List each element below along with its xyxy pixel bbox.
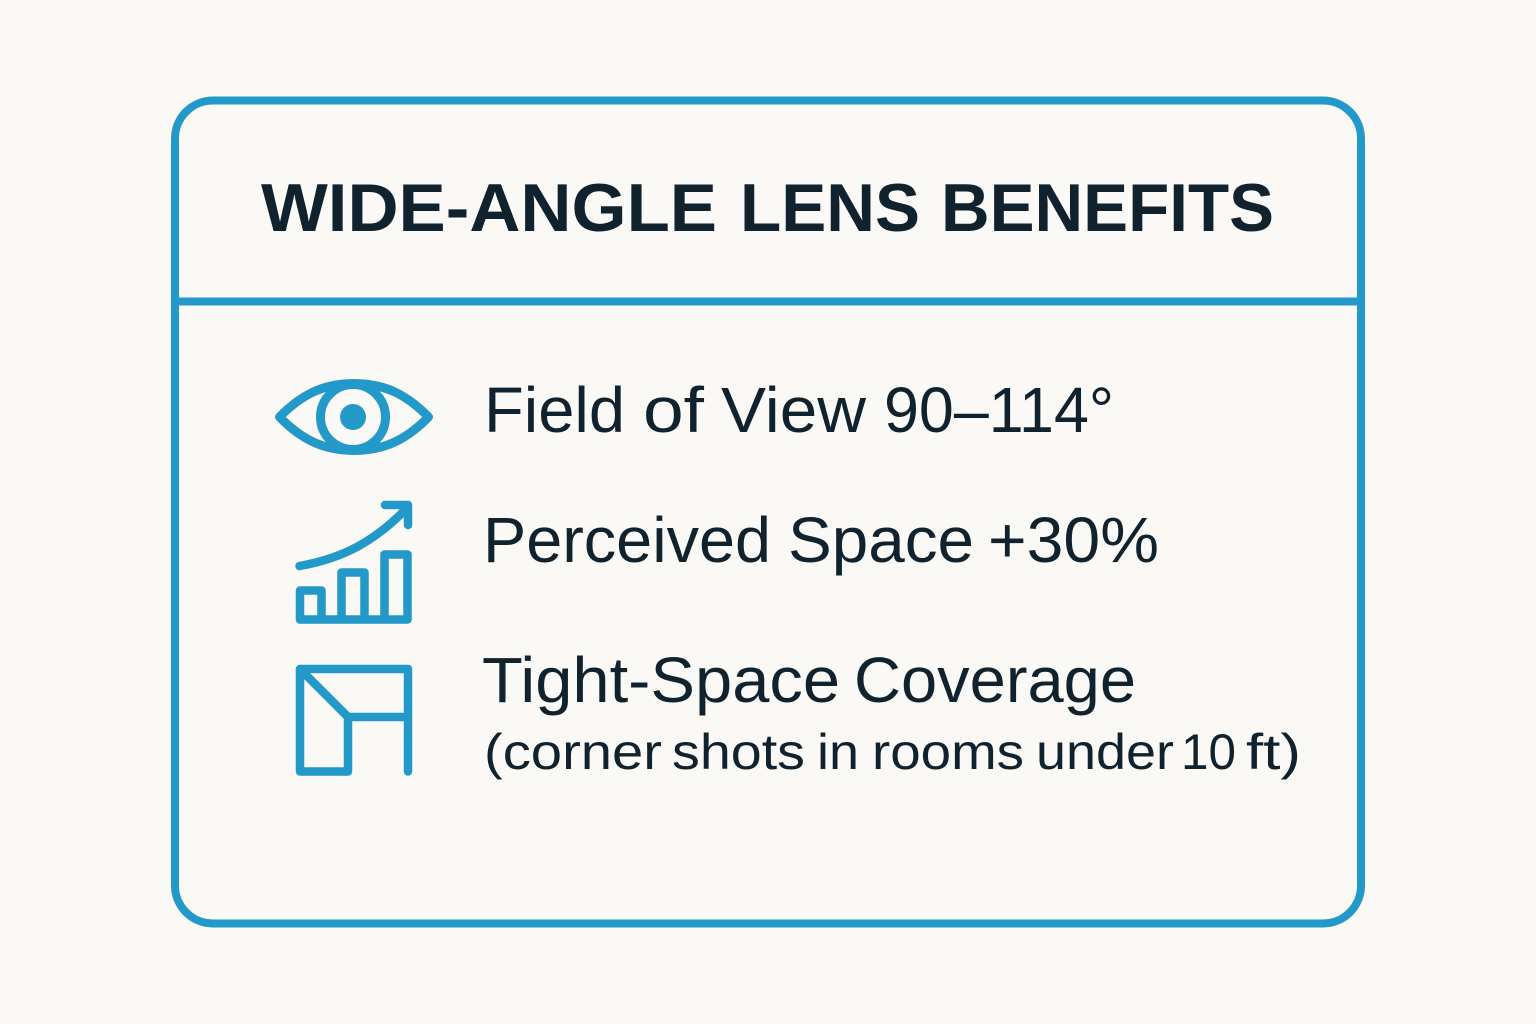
text: coverage note: rooms — [872, 724, 1024, 780]
title: LENS — [740, 170, 920, 246]
text: field of view: View — [721, 374, 867, 446]
text: perceived space: Perceived — [483, 504, 771, 576]
text: tight-space coverage: Tight-Space — [482, 644, 840, 716]
text: coverage note: ft) — [1246, 724, 1301, 780]
text: coverage note: (corner — [484, 724, 662, 780]
text: coverage note: shots — [672, 724, 805, 780]
panel: card frame — [175, 100, 1361, 924]
text: field of view: Field — [484, 374, 625, 446]
text: perceived space: Space — [788, 504, 974, 576]
text: perceived space: +30% — [988, 504, 1159, 576]
text: field of view: 90–114° — [884, 374, 1114, 446]
text: coverage note: under — [1036, 724, 1174, 780]
text: coverage note: 10 — [1181, 724, 1236, 780]
title: WIDE-ANGLE — [261, 170, 717, 246]
text: tight-space coverage: Coverage — [854, 644, 1136, 716]
icon: growth chart — [300, 505, 408, 620]
text: field of view: of — [643, 374, 704, 446]
icon: room corner — [300, 669, 408, 772]
icon: eye — [280, 384, 428, 450]
title: BENEFITS — [941, 170, 1274, 246]
text: coverage note: in — [817, 724, 859, 780]
